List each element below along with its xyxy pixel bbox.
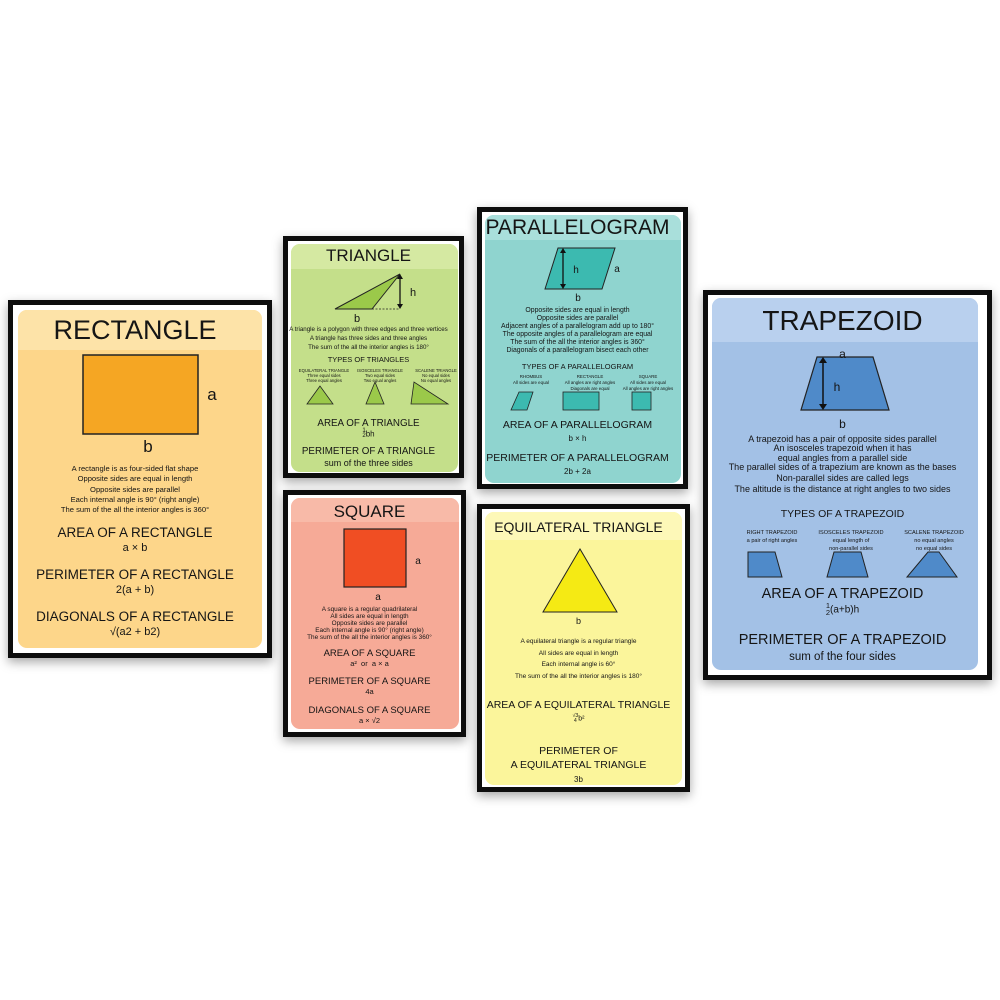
poster: rectangle bbox=[8, 300, 272, 658]
perimeter: 3b bbox=[574, 775, 583, 784]
title: RECTANGLE bbox=[53, 315, 217, 345]
label b: b bbox=[576, 616, 581, 626]
types heading: TYPES OF A TRAPEZOID bbox=[781, 508, 904, 520]
poster: triangle bbox=[283, 236, 464, 478]
poster: triangle: No equal angles bbox=[421, 378, 451, 383]
description: Opposite sides are parallel bbox=[537, 315, 618, 322]
description: Opposite sides are equal in length bbox=[78, 474, 192, 483]
description: Each internal angle is 60° bbox=[542, 661, 615, 668]
labels: a bbox=[415, 556, 421, 567]
area: AREA OF A TRAPEZOID bbox=[762, 586, 923, 602]
poster: trapezoid: ISOSCELES TRAPEZOID bbox=[818, 530, 884, 536]
perimeter formula: 2(a + b) bbox=[116, 584, 154, 596]
description: All sides are equal in length bbox=[539, 650, 618, 657]
perimeter formula: PERIMETER OF A RECTANGLE bbox=[36, 567, 234, 582]
description: The sum of the all the interior angles is 180° bbox=[515, 673, 642, 680]
perimeter formula bbox=[36, 567, 234, 596]
poster: parallelogram: All sides are equal bbox=[630, 380, 666, 385]
description: equal angles from a parallel side bbox=[778, 453, 907, 463]
diagonal formula bbox=[36, 609, 234, 638]
area: AREA OF A TRIANGLE bbox=[317, 418, 420, 429]
area: b × h bbox=[568, 434, 586, 442]
perimeter bbox=[510, 745, 646, 784]
poster: trapezoid bbox=[703, 290, 992, 680]
perimeter bbox=[309, 676, 430, 696]
poster: equilateral triangle: √3 bbox=[572, 713, 578, 719]
shape: triangle bbox=[542, 548, 618, 612]
card background bbox=[291, 498, 459, 729]
description bbox=[61, 464, 209, 514]
labels: a bbox=[839, 347, 846, 361]
perimeter: PERIMETER OF A PARALLELOGRAM bbox=[486, 452, 669, 464]
poster: triangle: Two equal angles bbox=[364, 378, 396, 383]
poster: triangle: 1 bbox=[362, 428, 366, 434]
description: Each internal angle is 90° (right angle) bbox=[315, 627, 424, 634]
types labels: a pair of right angles bbox=[747, 538, 797, 544]
poster: parallelogram bbox=[477, 207, 688, 489]
diagonal formula: DIAGONALS OF A RECTANGLE bbox=[36, 609, 234, 624]
description bbox=[307, 606, 432, 641]
description: Diagonals of a parallelogram bisect each other bbox=[506, 347, 649, 354]
description: Opposite sides are equal in length bbox=[525, 307, 630, 314]
poster: parallelogram: All angles are right angles bbox=[565, 380, 615, 385]
types heading: TYPES OF A PARALLELOGRAM bbox=[522, 362, 633, 371]
poster: trapezoid: equal length of bbox=[833, 538, 869, 544]
shape: rectangle bbox=[82, 354, 199, 435]
card background bbox=[712, 298, 978, 670]
poster: parallelogram: a bbox=[614, 264, 620, 275]
description: A square is a regular quadrilateral bbox=[322, 606, 417, 613]
description: Adjacent angles of a parallelogram add up to 180° bbox=[501, 323, 654, 330]
poster: trapezoid: no equal sides bbox=[916, 546, 952, 552]
poster: equilateral triangle: b² bbox=[578, 716, 585, 723]
poster: parallelogram: b bbox=[575, 293, 581, 304]
description: Each internal angle is 90° (right angle) bbox=[71, 495, 199, 504]
types labels: Three equal sides bbox=[307, 373, 341, 378]
title: EQUILATERAL TRIANGLE bbox=[494, 519, 663, 535]
description bbox=[728, 434, 956, 494]
description: The sum of the all the interior angles is 360° bbox=[307, 634, 432, 641]
card background bbox=[18, 310, 262, 648]
perimeter: 2b + 2a bbox=[564, 466, 591, 476]
types labels: All sides are equal bbox=[513, 380, 549, 385]
title: SQUARE bbox=[334, 502, 405, 521]
diagonals: a × √2 bbox=[359, 716, 380, 724]
card background bbox=[485, 215, 681, 483]
poster: trapezoid: (a+b)h bbox=[830, 604, 859, 615]
perimeter: 4a bbox=[365, 686, 374, 696]
perimeter: A EQUILATERAL TRIANGLE bbox=[511, 759, 646, 771]
poster: trapezoid: non-parallel sides bbox=[829, 546, 873, 552]
description bbox=[501, 306, 654, 354]
area formula bbox=[57, 525, 213, 554]
area formula: AREA OF A RECTANGLE bbox=[57, 525, 213, 540]
poster: triangle: bh bbox=[366, 430, 375, 438]
types heading: TYPES OF TRIANGLES bbox=[328, 355, 409, 364]
types labels: EQUILATERAL TRIANGLE bbox=[299, 368, 349, 373]
title: PARALLELOGRAM bbox=[485, 216, 670, 239]
types labels bbox=[299, 368, 349, 383]
poster: square: a bbox=[375, 592, 381, 603]
area formula: a × b bbox=[123, 542, 147, 554]
types labels: RIGHT TRAPEZOID bbox=[747, 530, 797, 536]
poster: parallelogram: SQUARE bbox=[639, 374, 657, 379]
diagonals: DIAGONALS OF A SQUARE bbox=[309, 705, 430, 716]
poster: triangle: Two equal sides bbox=[365, 373, 395, 378]
card background bbox=[485, 512, 682, 785]
labels: h bbox=[573, 265, 579, 276]
description bbox=[515, 638, 642, 680]
shapes bbox=[748, 356, 958, 578]
perimeter: PERIMETER OF bbox=[539, 745, 618, 757]
labels: h bbox=[410, 287, 416, 299]
diagonal formula: √(a2 + b2) bbox=[110, 626, 160, 638]
poster: triangle: 2 bbox=[362, 433, 366, 439]
description: Opposite sides are parallel bbox=[90, 485, 180, 494]
title: TRIANGLE bbox=[326, 246, 411, 265]
description: The sum of the all the interior angles is 360° bbox=[510, 339, 645, 346]
poster: trapezoid: 2 bbox=[826, 608, 830, 617]
description: The opposite angles of a parallelogram are equal bbox=[503, 331, 652, 338]
description bbox=[289, 326, 448, 351]
description: A triangle has three sides and three angles bbox=[310, 335, 427, 342]
poster: trapezoid: b bbox=[839, 417, 846, 431]
types labels: RHOMBUS bbox=[520, 374, 542, 379]
types labels bbox=[513, 374, 549, 385]
poster: parallelogram: Diagonals are equal bbox=[570, 386, 610, 391]
shape: square bbox=[343, 528, 407, 588]
description: A triangle is a polygon with three edges and three vertices bbox=[289, 326, 448, 333]
area bbox=[502, 419, 652, 442]
description: The sum of the all the interior angles is 180° bbox=[308, 344, 429, 351]
description: A trapezoid has a pair of opposite sides parallel bbox=[748, 434, 937, 444]
poster: triangle: SCALENE TRIANGLE bbox=[415, 368, 457, 373]
types labels: Three equal angles bbox=[306, 378, 342, 383]
area bbox=[324, 648, 416, 668]
label b: b bbox=[143, 437, 153, 456]
perimeter: PERIMETER OF A SQUARE bbox=[309, 676, 430, 687]
description: A equilateral triangle is a regular triangle bbox=[520, 638, 636, 645]
area: AREA OF A EQUILATERAL TRIANGLE bbox=[487, 699, 670, 711]
poster: equilateral triangle: 4 bbox=[574, 718, 577, 724]
poster: parallelogram: All angles are right angles bbox=[623, 386, 673, 391]
description: The sum of the all the interior angles is 360° bbox=[61, 505, 209, 514]
poster: triangle: b bbox=[354, 313, 360, 325]
poster: equilateral triangle bbox=[477, 504, 690, 792]
perimeter: PERIMETER OF A TRIANGLE bbox=[302, 446, 435, 457]
poster: square bbox=[283, 490, 466, 737]
shapes: triangles bbox=[306, 274, 450, 404]
description: Opposite sides are parallel bbox=[332, 620, 407, 627]
types labels bbox=[746, 530, 798, 544]
area: a² or a × a bbox=[350, 658, 389, 668]
poster: triangle: No equal sides bbox=[422, 373, 450, 378]
description: An isosceles trapezoid when it has bbox=[773, 443, 912, 453]
label a: a bbox=[207, 385, 217, 404]
description: Non-parallel sides are called legs bbox=[776, 473, 909, 483]
description: All sides are equal in length bbox=[330, 613, 409, 620]
poster: triangle: ISOSCELES TRIANGLE bbox=[357, 368, 403, 373]
poster: parallelogram: RECTANGLE bbox=[577, 374, 603, 379]
poster: trapezoid: SCALENE TRAPEZOID bbox=[904, 530, 964, 536]
description: A rectangle is as four-sided flat shape bbox=[72, 464, 198, 473]
poster: trapezoid: no equal angles bbox=[914, 538, 954, 544]
area: AREA OF A PARALLELOGRAM bbox=[503, 419, 652, 431]
title: TRAPEZOID bbox=[762, 305, 923, 336]
poster: triangle: sum of the three sides bbox=[324, 458, 413, 468]
shapes bbox=[510, 248, 652, 410]
perimeter: PERIMETER OF A TRAPEZOID bbox=[739, 632, 946, 648]
card background bbox=[291, 244, 458, 472]
area: AREA OF A SQUARE bbox=[324, 648, 415, 659]
perimeter bbox=[486, 452, 669, 476]
poster: trapezoid: 1 bbox=[826, 601, 830, 610]
diagonals bbox=[309, 705, 430, 724]
poster: trapezoid: sum of the four sides bbox=[789, 651, 896, 663]
description: The parallel sides of a trapezium are known as the bases bbox=[729, 462, 956, 472]
poster: trapezoid: h bbox=[834, 380, 840, 394]
description: The altitude is the distance at right angles to two sides bbox=[734, 484, 951, 494]
